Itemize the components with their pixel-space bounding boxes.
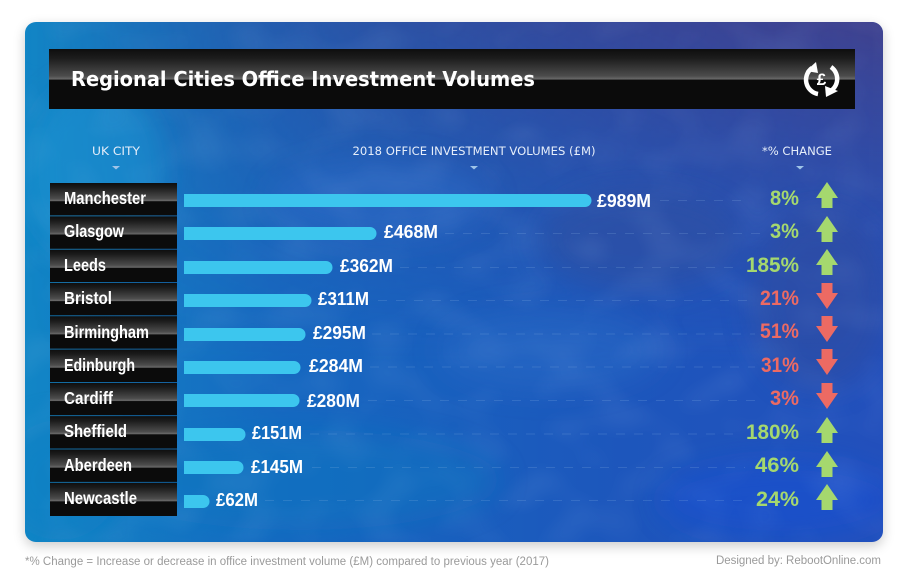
column heading: UK city	[92, 144, 141, 170]
row: Manchester: Manchester	[64, 188, 146, 208]
change: Bristol down 21%: 21%	[760, 287, 799, 310]
row: Leeds: Leeds	[64, 255, 106, 275]
row: Cardiff	[50, 383, 177, 415]
row: Birmingham: Birmingham	[64, 322, 149, 342]
change: Bristol down 21%	[760, 283, 838, 310]
bar: Newcastle	[184, 489, 258, 510]
row: Manchester	[50, 183, 177, 216]
change: Newcastle up 24%	[756, 484, 838, 511]
change: Birmingham down 51%	[760, 316, 838, 343]
row: Birmingham	[50, 316, 177, 349]
row: Bristol: Bristol	[64, 288, 112, 308]
bar: Cardiff	[184, 390, 360, 411]
title bar	[49, 49, 855, 109]
title: Regional Cities Office Investment Volumes	[71, 67, 535, 91]
change: Leeds up 185%: 185%	[746, 254, 799, 277]
bar: Bristol: £311M	[318, 288, 369, 309]
row: Edinburgh	[50, 350, 177, 382]
row: Leeds	[50, 250, 177, 282]
bar: Manchester	[184, 190, 651, 211]
row: Glasgow	[50, 216, 177, 249]
change: Sheffield up 180%: 180%	[746, 421, 799, 444]
change: Aberdeen up 46%: 46%	[755, 454, 799, 477]
icon: pound currency exchange	[806, 62, 838, 97]
bar: Sheffield: £151M	[252, 422, 302, 443]
column heading: investment volumes	[352, 144, 596, 170]
bar: Birmingham: £295M	[313, 322, 366, 343]
row: Aberdeen: Aberdeen	[64, 455, 132, 475]
bar: Newcastle: £62M	[216, 489, 258, 510]
row: Cardiff: Cardiff	[64, 388, 113, 408]
bar: Bristol	[184, 288, 369, 309]
city label column	[50, 183, 177, 516]
row: Sheffield	[50, 416, 177, 449]
bar: Sheffield	[184, 422, 302, 443]
change: Birmingham down 51%: 51%	[760, 320, 799, 343]
bar: Aberdeen	[184, 456, 303, 477]
bar: Cardiff: £280M	[307, 390, 360, 411]
change: Newcastle up 24%: 24%	[756, 488, 799, 511]
bar: Glasgow: £468M	[384, 221, 438, 242]
bar: Leeds: £362M	[340, 255, 393, 276]
change: Edinburgh down 31%	[761, 349, 838, 377]
change: Manchester up 8%	[770, 182, 838, 210]
credit: Designed by: RebootOnline.com	[716, 555, 881, 567]
bar chart	[184, 190, 651, 510]
change: Glasgow up 3%: 3%	[770, 220, 799, 243]
change: Cardiff down 3%	[770, 383, 838, 410]
bar: Edinburgh	[184, 355, 363, 376]
row: Glasgow: Glasgow	[64, 221, 124, 241]
bar: Birmingham	[184, 322, 366, 343]
column heading: investment volumes: 2018 OFFICE INVESTMENT VOLUMES (£M)	[352, 144, 596, 158]
column heading: UK city: UK CITY	[92, 144, 141, 158]
bar: Aberdeen: £145M	[251, 456, 303, 477]
row: Newcastle: Newcastle	[64, 488, 137, 508]
bar: Glasgow	[184, 221, 438, 242]
change: Glasgow up 3%	[770, 216, 838, 243]
column heading: percent change: *% CHANGE	[762, 144, 832, 158]
row: Edinburgh: Edinburgh	[64, 355, 135, 375]
icon: pound currency exchange: £	[817, 70, 827, 89]
row: Newcastle	[50, 483, 177, 516]
bar: Manchester: £989M	[597, 190, 651, 211]
dashed guide lines	[265, 200, 765, 500]
change: Aberdeen up 46%	[755, 451, 838, 477]
row: Aberdeen	[50, 449, 177, 482]
column heading: percent change	[762, 144, 832, 170]
change: Leeds up 185%	[746, 249, 838, 277]
percent change column	[746, 182, 838, 511]
bar: Leeds	[184, 255, 393, 276]
change: Cardiff down 3%: 3%	[770, 387, 799, 410]
change: Sheffield up 180%	[746, 417, 838, 444]
change: Manchester up 8%: 8%	[770, 187, 799, 210]
bar: Edinburgh: £284M	[309, 355, 363, 376]
footnote: *% Change = Increase or decrease in office investment volume (£M) compared to previous year (2017)	[25, 556, 549, 568]
row: Bristol	[50, 283, 177, 315]
row: Sheffield: Sheffield	[64, 421, 127, 441]
change: Edinburgh down 31%: 31%	[761, 354, 799, 377]
